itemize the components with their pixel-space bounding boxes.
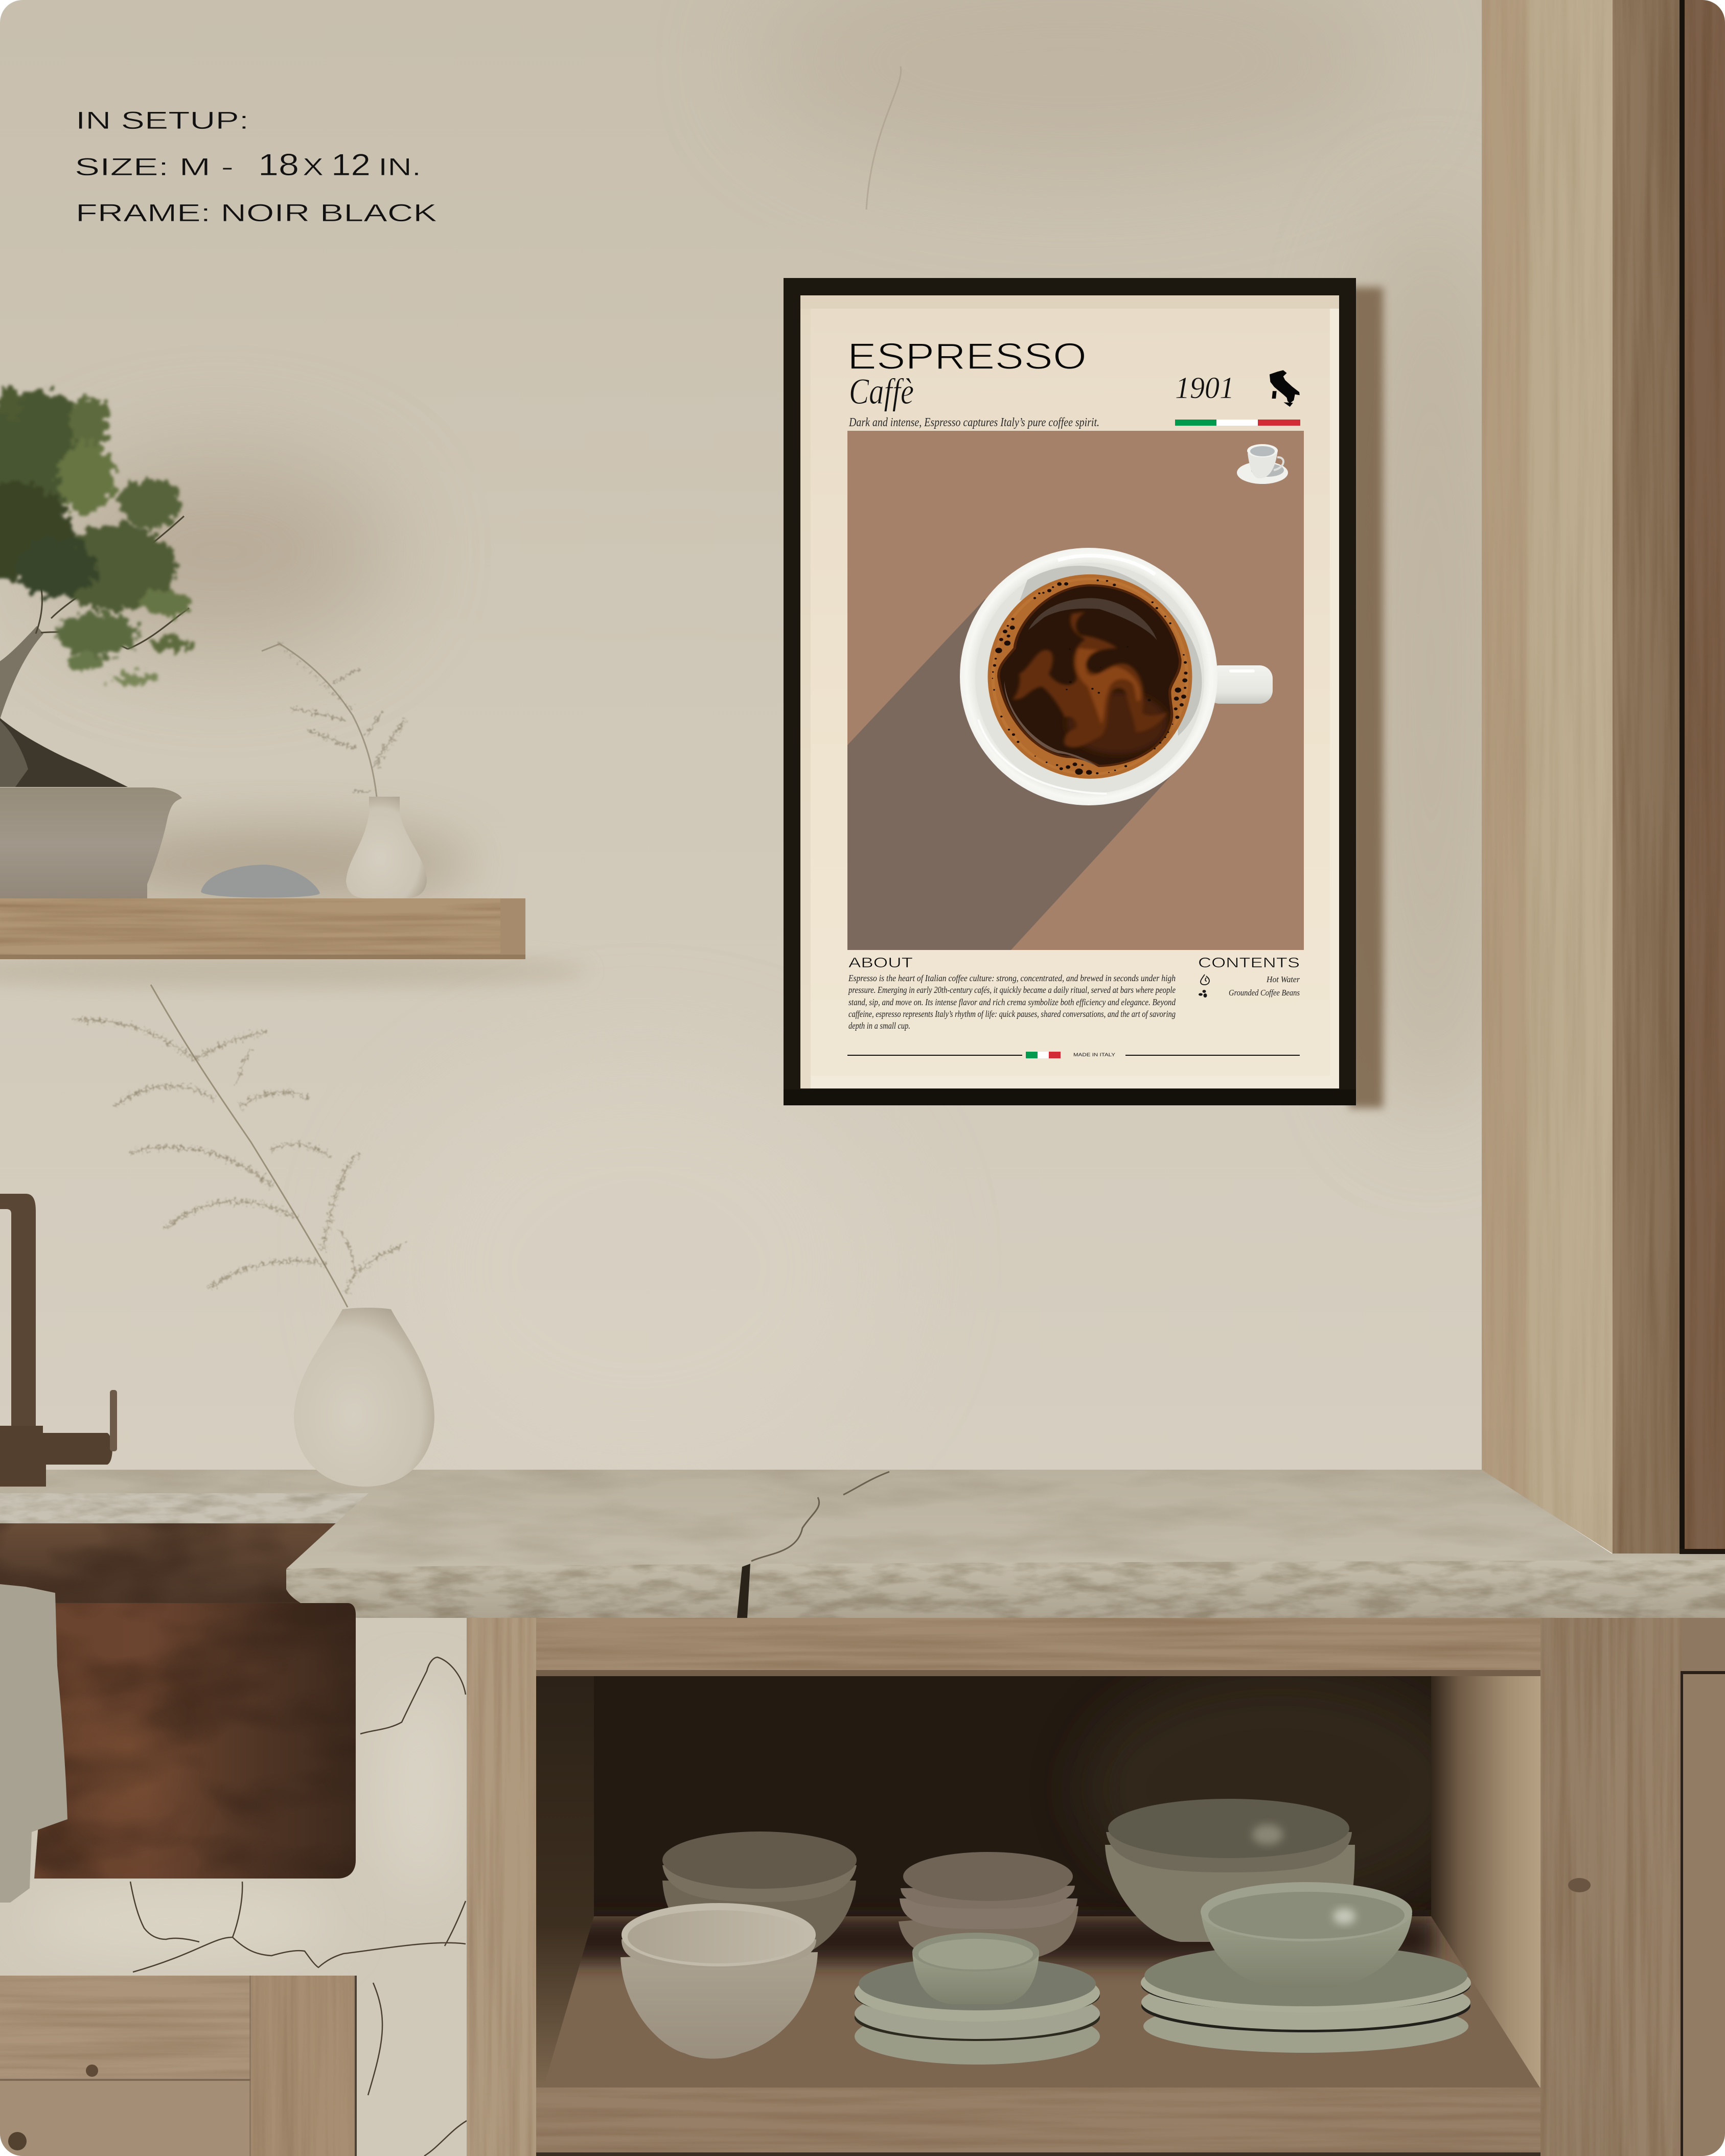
large ceramic vase — [294, 1308, 434, 1487]
icon: map of Italy — [1270, 370, 1300, 407]
plaster wall below sink — [0, 1597, 467, 2156]
about paragraph: stand, sip, and move on. Its intense flavor and rich crema symbolize both efficiency and elegance. Beyond — [848, 997, 1176, 1007]
counter crack — [751, 1472, 889, 1561]
text block: setup specification: IN SETUP: — [76, 107, 249, 134]
green bowl on plates — [1201, 1882, 1412, 1988]
footer rule and made in Italy mark: MADE IN ITALY — [1073, 1052, 1115, 1057]
text block: setup specification — [75, 107, 437, 227]
stacked plates middle — [855, 1957, 1100, 2065]
faucet — [0, 1194, 117, 1487]
about paragraph — [847, 973, 1176, 1031]
coffee — [987, 574, 1192, 779]
shelf floor — [532, 1916, 1542, 2090]
text block: setup specification: FRAME: NOIR BLACK — [76, 200, 437, 227]
surface reflection — [1028, 598, 1157, 640]
text block: setup specification: IN. — [378, 154, 421, 181]
about paragraph: caffeine, espresso represents Italy’s rhythm of life: quick pauses, shared conversations, and the art of savoring — [848, 1009, 1176, 1019]
text block: setup specification: 12 — [331, 148, 371, 182]
long cup shadow — [847, 599, 1175, 950]
small green cup — [912, 1933, 1039, 2004]
label: Hot Water — [1266, 975, 1300, 984]
cup rim highlights — [1058, 555, 1155, 574]
foliage — [0, 388, 193, 684]
trunk — [0, 626, 43, 736]
poster title: ESPRESSO — [847, 336, 1087, 377]
back panel — [536, 1676, 1543, 1916]
small ceramic vase — [346, 797, 427, 898]
counter front edge — [286, 1560, 1725, 1618]
dark coffee body — [999, 585, 1180, 766]
about heading: ABOUT — [848, 955, 913, 970]
back bowls — [662, 1881, 856, 1965]
poster paper — [800, 295, 1339, 1088]
crema swirl — [1013, 612, 1167, 748]
top rail — [536, 1618, 1542, 1675]
dried sprig in large vase — [74, 985, 405, 1307]
linen towel — [0, 1584, 67, 1903]
roots and soil — [0, 718, 128, 787]
small pebble — [201, 865, 320, 898]
floating wood shelf — [0, 898, 525, 959]
coffee cup top view — [960, 548, 1273, 805]
right stiles and door — [1540, 1618, 1607, 2156]
copper sink apron — [34, 1603, 356, 1879]
about paragraph: pressure. Emerging in early 20th-century cafés, it quickly became a daily ritual, served at bars where people — [847, 985, 1176, 995]
stacked bowls middle — [899, 1852, 1078, 1957]
panel: framed espresso poster — [784, 278, 1383, 1108]
text block: setup specification: X — [303, 154, 324, 181]
sink rim — [0, 1491, 388, 1523]
cup rim — [960, 548, 1217, 805]
kitchen counter — [0, 1470, 1725, 1618]
icon: coffee beans — [1199, 990, 1207, 998]
counter top — [0, 1470, 1725, 1569]
large bowls right — [1105, 1799, 1355, 1942]
label: Grounded Coffee Beans — [1229, 988, 1300, 998]
stacked plates right — [1141, 1945, 1471, 2053]
year: 1901 — [1175, 371, 1234, 405]
bonsai pot — [0, 787, 182, 898]
shelf front edge — [536, 2088, 1542, 2152]
lower left drawer front — [0, 1976, 357, 2156]
text block: setup specification: 18 — [258, 148, 299, 182]
left stile — [467, 1618, 536, 2156]
front bowls — [620, 1952, 818, 2058]
illustration panel — [847, 431, 1304, 950]
panel: upper wood cabinet — [1482, 0, 1725, 1554]
poster frame — [784, 278, 1356, 1105]
bubbles — [992, 579, 1188, 775]
cup inner wall — [975, 563, 1204, 794]
flag stripe — [1175, 420, 1300, 426]
about paragraph: depth in a small cup. — [848, 1021, 910, 1031]
bonsai tree — [0, 388, 193, 787]
poster subtitle: Caffè — [849, 371, 914, 412]
about paragraph: Espresso is the heart of Italian coffee culture: strong, concentrated, and brewed in seconds under high — [848, 973, 1176, 983]
contents heading: CONTENTS — [1198, 955, 1300, 970]
stacked bowls left — [620, 1832, 857, 2058]
left interior side — [536, 1676, 594, 2090]
open lower cabinet — [467, 1618, 1725, 2156]
sink interior — [0, 1520, 409, 1605]
poster tagline: Dark and intense, Espresso captures Italy’s pure coffee spirit. — [848, 416, 1099, 429]
cup handle — [1206, 665, 1273, 704]
crema — [987, 574, 1192, 779]
right interior side — [1431, 1676, 1542, 2090]
text block: setup specification: SIZE: M - — [75, 154, 234, 181]
footer rule and made in Italy mark — [847, 1052, 1300, 1058]
icon: water drops — [1201, 975, 1209, 985]
panel: wall background — [0, 0, 1523, 1482]
contents: ground coffee beans — [1199, 988, 1300, 998]
icon: side view cup and saucer — [1237, 444, 1288, 484]
dried sprig in small vase — [262, 644, 405, 797]
contents: hot water — [1201, 975, 1300, 985]
frame shadow — [1349, 287, 1383, 1108]
